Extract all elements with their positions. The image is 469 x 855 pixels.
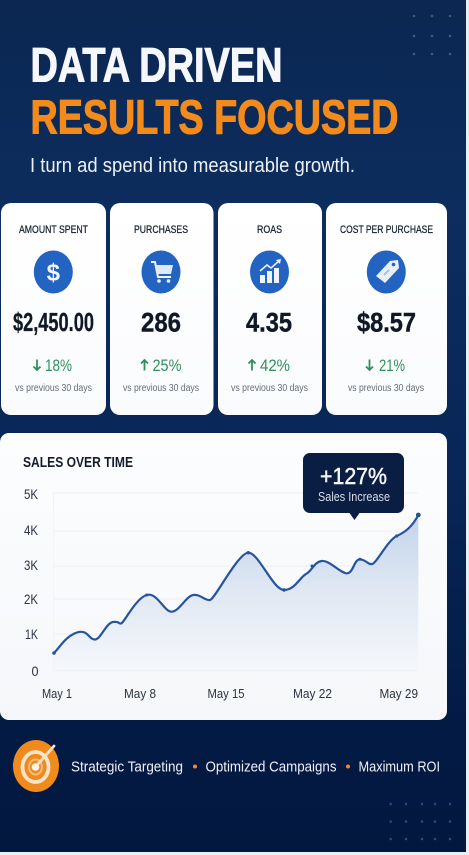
icon: price tag xyxy=(367,250,406,294)
icon: target with dart xyxy=(13,740,59,792)
panel: amount spent: vs previous 30 days xyxy=(15,383,92,394)
change: down 21%: 21% xyxy=(379,356,405,375)
y axis labels: 3K xyxy=(24,558,38,573)
panel: roas xyxy=(218,203,322,415)
panel: sales over time xyxy=(0,433,447,720)
y axis labels: 5K xyxy=(24,487,38,502)
data points xyxy=(52,513,421,655)
panel: cost per purchase: COST PER PURCHASE xyxy=(340,224,433,236)
change: up 25% xyxy=(141,356,182,375)
chart heading: SALES OVER TIME xyxy=(23,455,133,471)
change: down 21% xyxy=(366,356,405,375)
icon: cart xyxy=(142,250,180,294)
chart line xyxy=(54,515,418,653)
x axis labels xyxy=(42,686,418,701)
icon: dollar: $ xyxy=(47,260,61,286)
panel: amount spent: AMOUNT SPENT xyxy=(19,224,88,236)
panel: purchases: 286 xyxy=(141,308,181,338)
subtitle: I turn ad spend into measurable growth. xyxy=(30,154,355,177)
panel: cost per purchase xyxy=(326,203,447,415)
panel: purchases: PURCHASES xyxy=(134,224,188,236)
icon: dollar xyxy=(34,250,73,294)
y axis labels: 1K xyxy=(25,627,38,642)
callout: sales increase xyxy=(303,453,404,520)
title: DATA DRIVEN xyxy=(30,40,282,92)
callout: sales increase: Sales Increase xyxy=(318,490,390,504)
x axis labels: May 29 xyxy=(380,686,418,701)
tagline: Strategic Targeting xyxy=(71,760,183,776)
change: up 42%: 42% xyxy=(260,356,290,375)
panel: cost per purchase: $8.57 xyxy=(357,308,416,338)
decorative dots bottom right xyxy=(389,803,451,840)
panel: roas: 4.35 xyxy=(246,308,292,338)
icon: growth chart xyxy=(250,250,289,294)
callout: sales increase: +127% xyxy=(320,463,387,489)
panel: purchases xyxy=(110,203,214,415)
y axis labels: 2K xyxy=(24,592,38,607)
change: down 18%: 18% xyxy=(45,356,72,375)
panel: cost per purchase: vs previous 30 days xyxy=(348,383,424,394)
tagline xyxy=(71,760,440,776)
y axis labels: 0 xyxy=(32,664,38,679)
tagline: Optimized Campaigns xyxy=(206,760,336,776)
panel: roas: ROAS xyxy=(257,224,282,236)
y axis labels: 4K xyxy=(24,523,38,538)
x axis labels: May 15 xyxy=(208,686,244,701)
y axis labels xyxy=(24,487,38,679)
change: up 42% xyxy=(248,356,290,375)
panel: purchases: vs previous 30 days xyxy=(123,383,199,394)
panel: amount spent xyxy=(1,203,106,415)
chart area xyxy=(54,515,418,670)
x axis labels: May 1 xyxy=(42,686,72,701)
decorative dots top right xyxy=(413,15,451,55)
x axis labels: May 22 xyxy=(293,686,332,701)
change: down 18% xyxy=(34,356,72,375)
change: up 25%: 25% xyxy=(152,356,182,375)
title xyxy=(30,40,398,144)
tagline: Maximum ROI xyxy=(358,760,440,776)
x axis labels: May 8 xyxy=(124,686,156,701)
panel: amount spent: $2,450.00 xyxy=(13,307,94,337)
panel: roas: vs previous 30 days xyxy=(231,383,308,394)
